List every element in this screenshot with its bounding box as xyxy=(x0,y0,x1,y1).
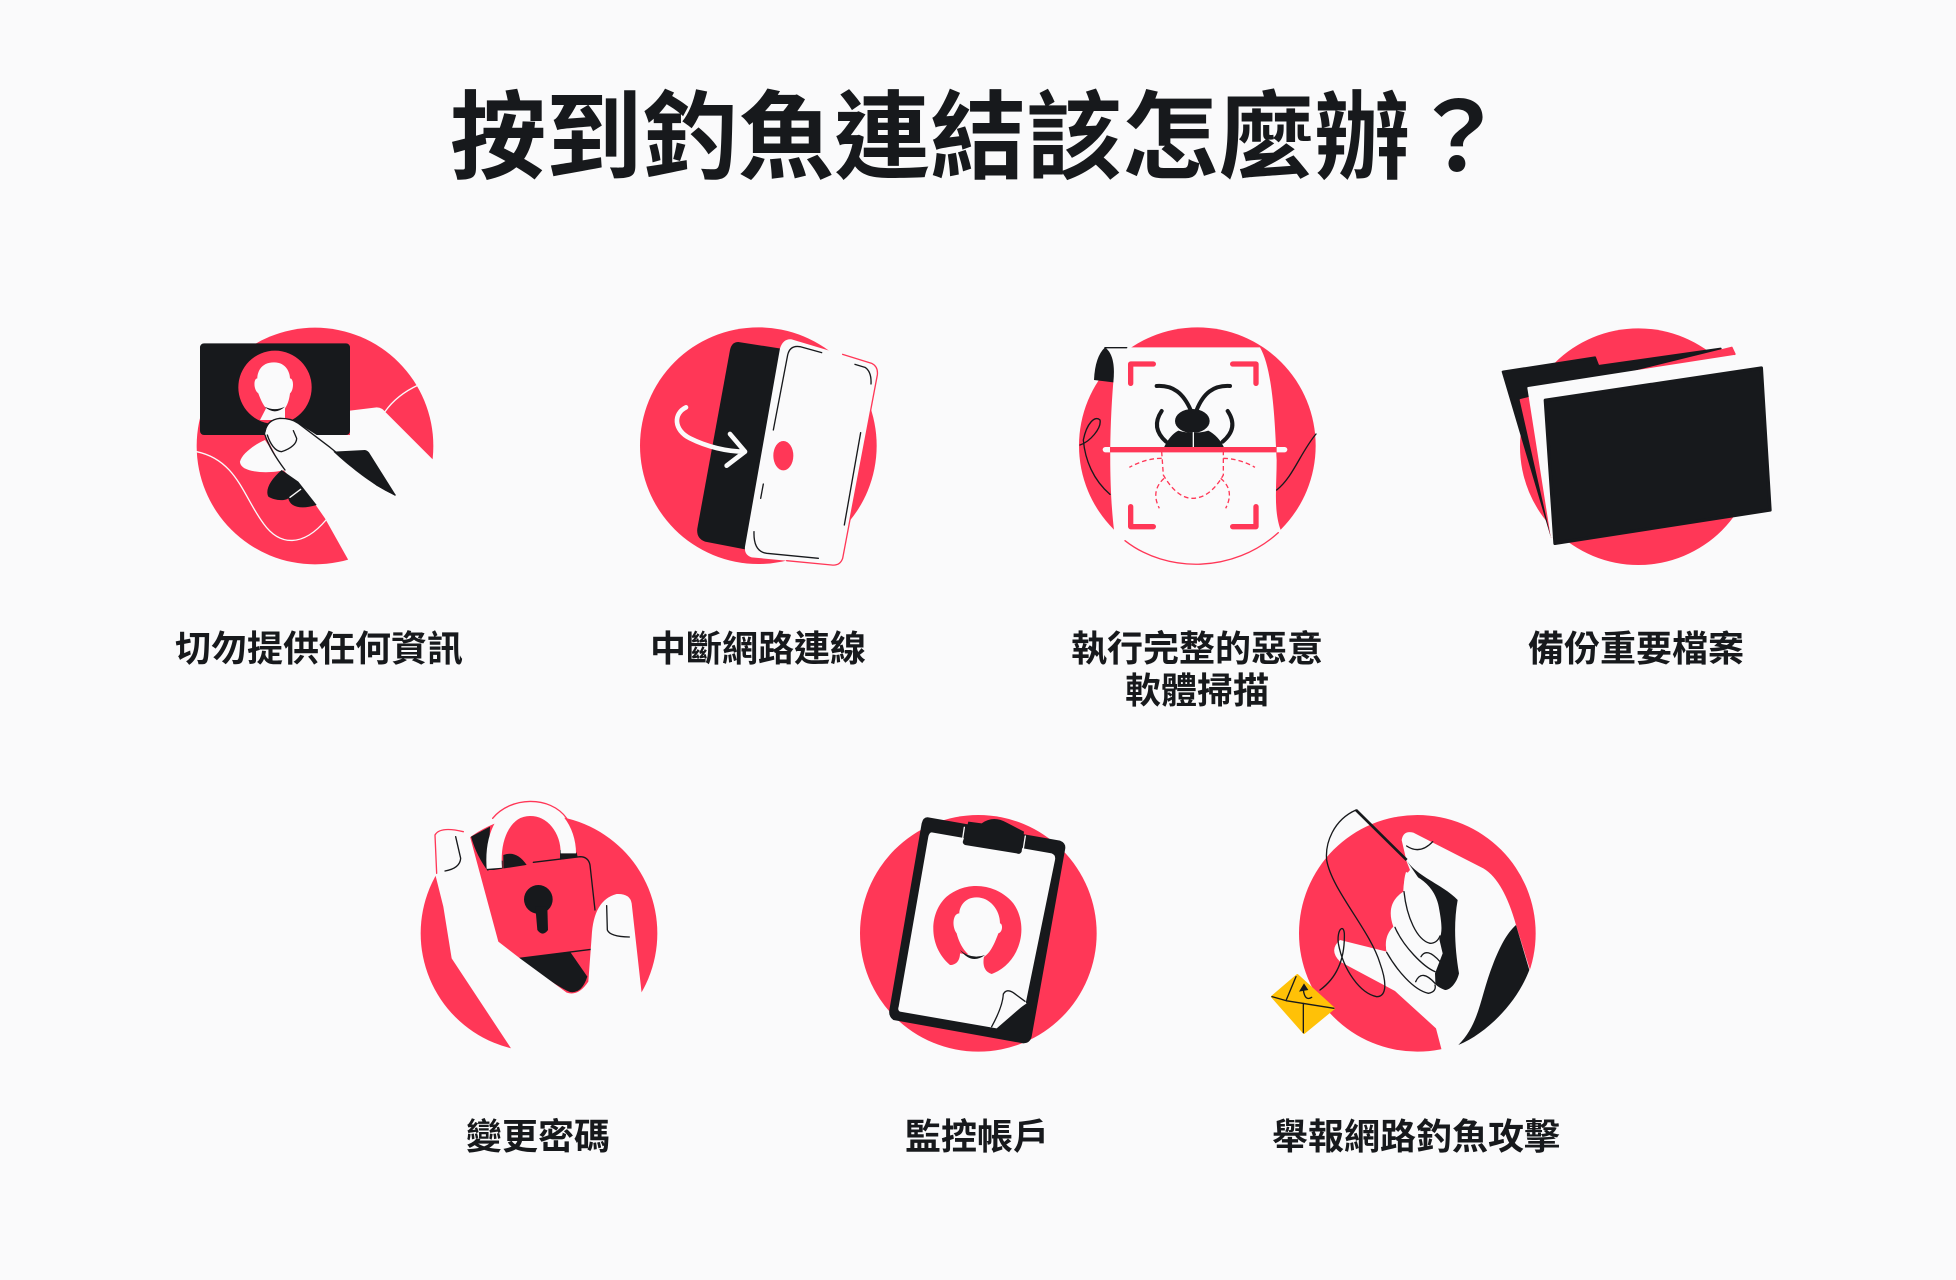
label: 切勿提供任何資訊: 切勿提供任何資訊 xyxy=(175,628,463,669)
icon: hand holding padlock xyxy=(421,801,663,1060)
label: 執行完整的惡意軟體掃描 xyxy=(1071,628,1323,711)
icon: folder with files xyxy=(1503,328,1770,565)
label: 舉報網路釣魚攻擊: 舉報網路釣魚攻擊 xyxy=(1272,1116,1560,1157)
label: 執行完整的惡意軟體掃描: 軟體掃描 xyxy=(1125,670,1269,711)
label: 變更密碼: 變更密碼 xyxy=(466,1116,610,1157)
icon: phone being flipped xyxy=(640,327,877,565)
icon: clipboard with profile xyxy=(860,815,1097,1052)
label: 中斷網路連線: 中斷網路連線 xyxy=(650,628,866,669)
icon: malware scan xyxy=(1079,327,1316,580)
icon: hand holding fishing rod with envelope xyxy=(1272,810,1537,1057)
icon: hand holding ID card xyxy=(197,328,457,573)
label: 備份重要檔案: 備份重要檔案 xyxy=(1528,628,1744,669)
label: 監控帳戶: 監控帳戶 xyxy=(905,1116,1049,1157)
label: 執行完整的惡意軟體掃描: 執行完整的惡意 xyxy=(1071,628,1323,669)
title: 按到釣魚連結該怎麼辦？ xyxy=(450,60,1506,199)
